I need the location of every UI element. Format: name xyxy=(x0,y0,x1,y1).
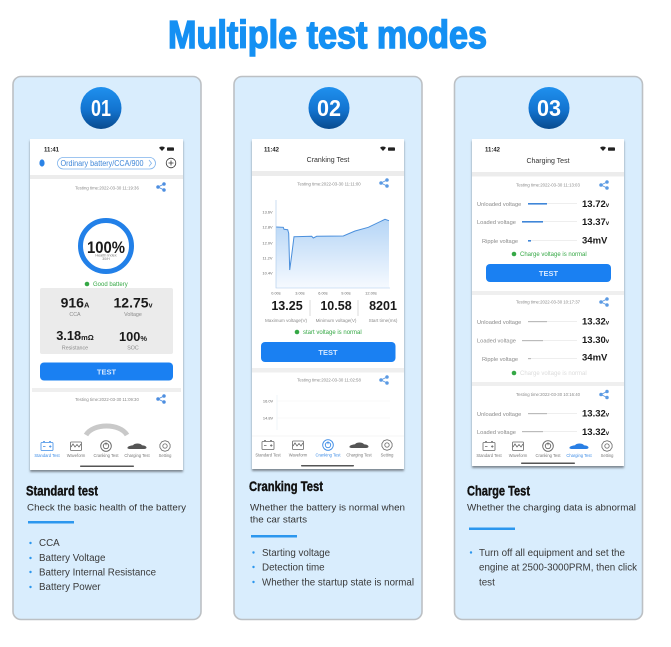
metrics panel: Resistance xyxy=(62,346,88,352)
metrics panel: SOC xyxy=(127,346,139,352)
bullet list: CCA xyxy=(39,538,60,549)
test record 2: Loaded voltage xyxy=(477,338,516,344)
metrics panel: 100% xyxy=(119,329,147,344)
metrics panel: Voltage xyxy=(124,312,142,318)
test time row xyxy=(297,179,388,187)
tab bar xyxy=(472,436,624,466)
metrics panel: CCA xyxy=(69,312,81,318)
bullet list xyxy=(252,548,414,588)
test record 3: 13.32v xyxy=(582,408,610,420)
line chart: 13.6V xyxy=(262,210,273,214)
bullet list: Battery Internal Resistance xyxy=(39,568,157,578)
panel: charge test xyxy=(454,76,642,620)
line chart: 9.00s xyxy=(341,290,351,296)
line chart: 10.4V xyxy=(262,270,273,276)
line chart: 12.00s xyxy=(365,290,377,296)
line chart: 11.2V xyxy=(263,256,273,260)
status: good battery: Good battery xyxy=(93,282,128,288)
battery selector: Ordinary battery/CCA/900 xyxy=(60,159,144,168)
partial chart: 16.0V xyxy=(263,398,273,404)
readings: Minimum voltage(V) xyxy=(316,318,357,323)
badge: 02: 02 xyxy=(317,95,341,121)
text: charge test xyxy=(467,482,637,588)
test record 2: Ripple voltage xyxy=(482,357,518,363)
tab bar: Cranking Test xyxy=(316,452,341,458)
screen title: Charging Test xyxy=(526,158,570,165)
line chart: 6.00s xyxy=(318,290,328,296)
metrics panel: 3.18mΩ xyxy=(56,328,94,343)
phone screenshot: cranking test xyxy=(252,139,404,471)
readings: Start time(ms) xyxy=(369,318,398,323)
status bar: 11:42 xyxy=(264,148,280,154)
test record 3: 13.32v xyxy=(582,427,610,438)
button: test: TEST xyxy=(97,368,117,376)
badge: 03 xyxy=(528,87,570,129)
screen title: Cranking Test xyxy=(307,157,349,164)
text: charge test: Charge Test xyxy=(467,482,530,498)
text: standard test: Standard test xyxy=(26,482,98,498)
tab bar: Standard Test xyxy=(255,452,281,458)
status bar: 11:41 xyxy=(44,148,60,154)
line chart: 0.00s xyxy=(271,290,281,296)
test time row: Testing time:2022-03-30 11:19:36 xyxy=(75,186,139,190)
bullet list: Starting voltage xyxy=(262,548,331,559)
phone screenshot: charging test xyxy=(472,139,624,468)
battery selector xyxy=(39,158,176,169)
metrics panel: 916A xyxy=(61,294,90,310)
button: test: TEST xyxy=(318,348,338,357)
line chart: 3.00s xyxy=(295,290,305,296)
test record 1: 13.72v xyxy=(582,199,610,210)
gauge: 100%: 100% xyxy=(87,238,125,257)
test record 1: Unloaded voltage xyxy=(477,202,521,208)
previous test row: Testing time:2022-03-30 11:09:30 xyxy=(75,397,139,402)
button: test xyxy=(261,342,396,362)
tab bar: Standard Test xyxy=(34,453,60,458)
previous test row: Testing time:2022-03-30 11:02:58 xyxy=(297,378,361,382)
status bar xyxy=(264,147,395,154)
previous test row xyxy=(297,376,388,384)
tab bar: Charging Test xyxy=(566,453,592,458)
partial gauge xyxy=(86,426,127,435)
gauge: 100% xyxy=(80,220,132,272)
tab bar: Cranking Test xyxy=(94,453,119,458)
bullet list: test xyxy=(479,578,495,588)
text: cranking test: Cranking Test xyxy=(249,478,323,494)
test record 3: Loaded voltage xyxy=(477,430,516,436)
test record 1: Loaded voltage xyxy=(477,220,516,226)
line chart: 12.0V xyxy=(262,240,273,246)
test record 1: 13.37v xyxy=(582,217,610,228)
line chart: 12.8V xyxy=(262,224,273,230)
test time row: Testing time:2022-03-30 11:11:00 xyxy=(297,182,361,186)
bullet list: Turn off all equipment and set the xyxy=(479,548,626,559)
test record 3 xyxy=(477,390,610,438)
title: Multiple test modes xyxy=(168,14,487,57)
metrics panel xyxy=(40,288,173,354)
readings xyxy=(265,299,398,323)
bullet list: Whether the startup state is normal xyxy=(262,578,414,588)
bullet list xyxy=(470,548,637,588)
readings: Maximum voltage(V) xyxy=(265,318,308,323)
readings: 8201 xyxy=(369,299,397,313)
tab bar xyxy=(252,436,404,466)
test record 2: Testing time:2022-03-30 10:17:37 xyxy=(516,300,581,304)
test record 1: Ripple voltage xyxy=(482,239,518,245)
bullet list: Detection time xyxy=(262,562,325,574)
tab bar: Standard Test xyxy=(476,453,502,458)
text: standard test: Check the basic health of the battery xyxy=(27,502,186,514)
panel: standard test xyxy=(13,76,201,620)
tab bar: Setting xyxy=(381,452,394,458)
tab bar: Setting xyxy=(159,453,172,458)
line chart xyxy=(262,200,390,296)
test record 2: 13.30v xyxy=(582,335,610,346)
test record 3: Testing time:2022-03-30 10:16:40 xyxy=(516,392,581,397)
text: charge test: Whether the charging data is abnormal xyxy=(467,502,636,514)
bullet list: engine at 2500-3000PRM, then click xyxy=(479,562,637,574)
status: start voltage: start voltage is normal xyxy=(303,330,362,336)
test record 2: 34mV xyxy=(582,352,608,364)
test record 2: Charge voltage is normal xyxy=(520,371,587,377)
test record 1 xyxy=(477,181,610,258)
tab bar: Waveform xyxy=(509,453,528,458)
metrics panel: 12.75v xyxy=(114,294,153,310)
bullet list xyxy=(29,538,157,593)
button: test xyxy=(40,362,173,380)
tab bar: Waveform xyxy=(289,452,308,458)
phone screenshot: standard test xyxy=(30,139,183,472)
partial chart xyxy=(263,395,390,430)
badge: 01 xyxy=(80,87,122,129)
button: test xyxy=(486,264,611,282)
gauge: 100%: 30/H xyxy=(102,257,110,261)
tab bar: Charging Test xyxy=(124,453,150,458)
status bar: 11:42 xyxy=(485,148,501,154)
button: test: TEST xyxy=(539,269,559,278)
badge: 02 xyxy=(308,87,350,129)
tab bar: Cranking Test xyxy=(536,453,561,458)
text: cranking test: Whether the battery is normal when xyxy=(250,502,405,514)
panel: cranking test xyxy=(234,76,422,620)
status bar xyxy=(485,147,615,154)
test record 1: Testing time:2022-03-30 11:13:03 xyxy=(516,182,580,188)
tab bar: Charging Test xyxy=(346,452,372,458)
status bar xyxy=(44,147,174,154)
gauge: 100%: Health Index xyxy=(95,254,117,258)
test record 1: Charge voltage is normal xyxy=(520,252,587,258)
tab bar xyxy=(34,441,172,467)
badge: 03: 03 xyxy=(537,95,561,121)
tab bar: Waveform xyxy=(67,453,86,458)
readings: 10.58 xyxy=(320,299,352,313)
readings: 13.25 xyxy=(271,299,303,313)
partial chart: 14.8V xyxy=(263,416,273,420)
tab bar: Setting xyxy=(601,453,614,458)
test record 2: 13.32v xyxy=(582,316,610,328)
text: cranking test: the car starts xyxy=(250,514,307,526)
text: cranking test xyxy=(249,478,414,588)
text: standard test xyxy=(26,482,186,593)
bullet list: Battery Power xyxy=(39,582,101,593)
test record 2: Unloaded voltage xyxy=(477,320,521,326)
test record 2 xyxy=(477,298,610,377)
previous test row xyxy=(75,395,165,403)
test record 1: 34mV xyxy=(582,236,608,246)
bullet list: Battery Voltage xyxy=(39,553,106,564)
test record 3: Unloaded voltage xyxy=(477,412,521,418)
test time row xyxy=(75,183,165,191)
badge: 01: 01 xyxy=(91,95,111,121)
